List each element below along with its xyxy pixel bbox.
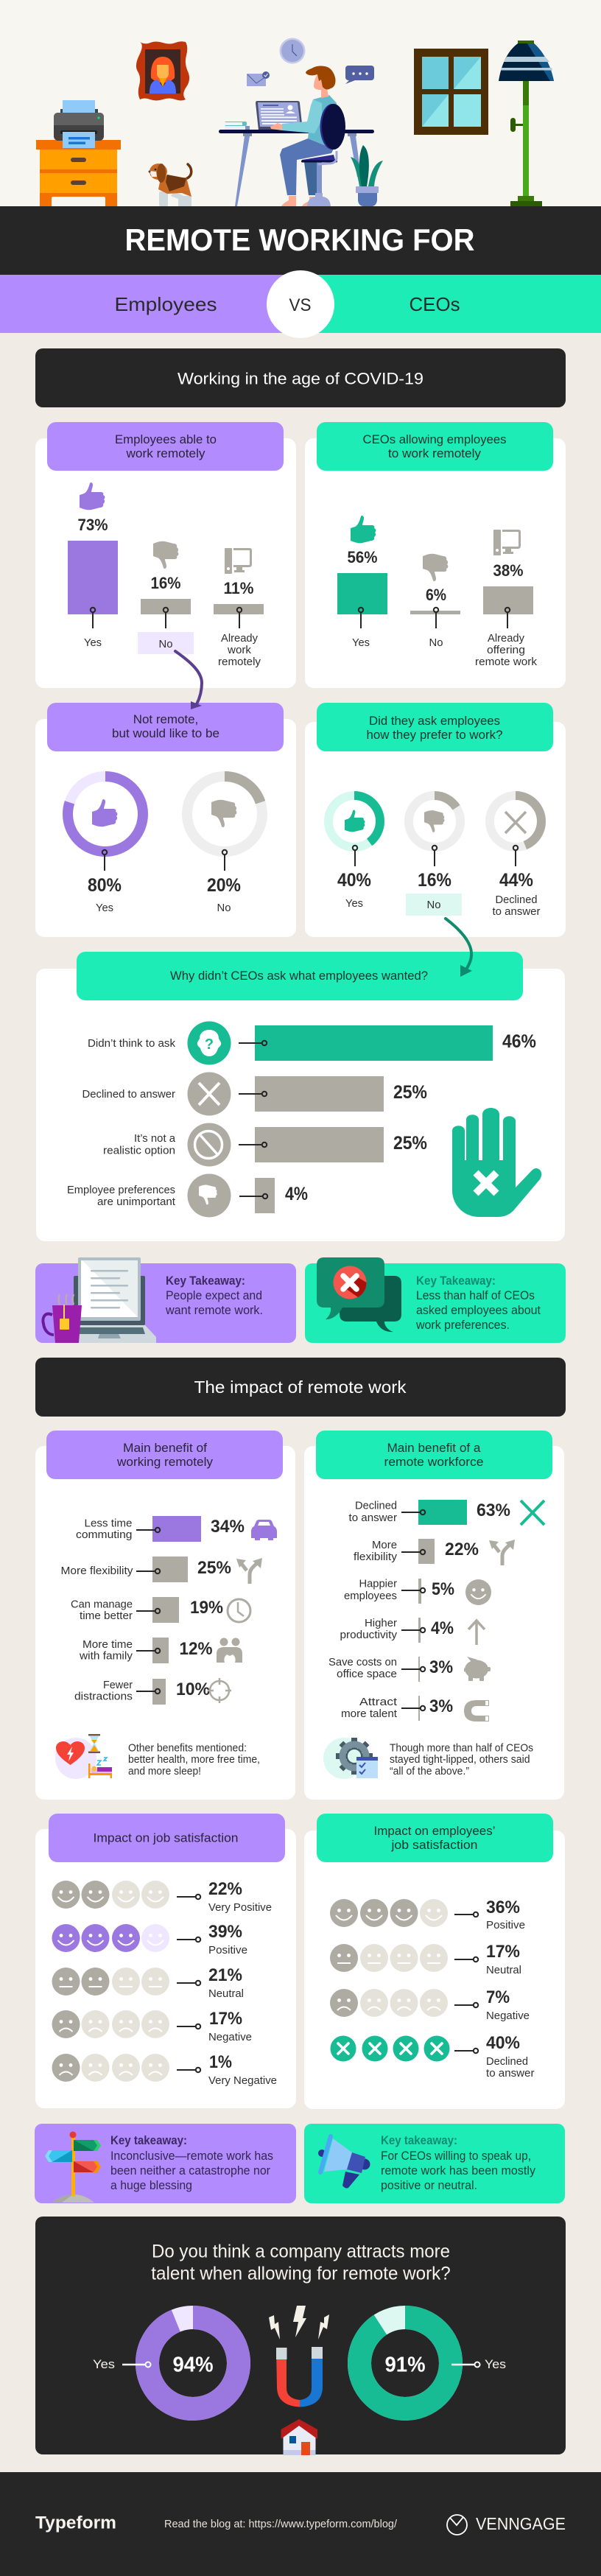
heading bbox=[317, 422, 553, 471]
heading bbox=[47, 422, 284, 471]
note text: Other benefits mentioned: bbox=[128, 1741, 247, 1755]
venngage logo: VENNGAGE bbox=[476, 2514, 566, 2533]
bar chart: 56% bbox=[348, 548, 377, 566]
heading bbox=[151, 2241, 451, 2284]
row: not a realistic option: realistic option bbox=[103, 1145, 175, 1157]
takeaway text: Key Takeaway: bbox=[416, 1274, 496, 1288]
panel: attract talent bbox=[35, 2217, 566, 2455]
row: attract talent bbox=[341, 1696, 489, 1722]
typeform logo: Typeform bbox=[35, 2513, 116, 2533]
row: fewer distractions: distractions bbox=[74, 1690, 133, 1703]
takeaway text: For CEOs willing to speak up, bbox=[381, 2149, 531, 2163]
row: happier employees bbox=[344, 1578, 491, 1605]
panel: not remote but would like to be bbox=[35, 703, 296, 937]
donut: 44 declined: Declined bbox=[495, 894, 538, 906]
heading: Main benefit of bbox=[123, 1441, 207, 1455]
row: neutral: 21% bbox=[208, 1965, 242, 1985]
donut: 16 no bbox=[406, 796, 462, 916]
donut: 80 yes bbox=[68, 776, 143, 914]
donut: 40 yes bbox=[328, 796, 380, 910]
vs badge bbox=[267, 270, 334, 338]
icon: desk top bbox=[219, 130, 374, 133]
takeaway text: asked employees about bbox=[416, 1304, 541, 1317]
icon: computer bbox=[225, 548, 252, 574]
label: yes: Yes bbox=[84, 636, 102, 649]
row: very positive: Very Positive bbox=[208, 1901, 272, 1914]
icon: megaphone bbox=[318, 2136, 370, 2189]
heading bbox=[317, 703, 553, 751]
takeaway text: positive or neutral. bbox=[381, 2178, 477, 2192]
icon: lightning bolts bbox=[269, 2306, 329, 2340]
icon: office chair bbox=[301, 104, 345, 206]
label: no highlighted bbox=[138, 632, 194, 654]
icon: thumbs up bbox=[80, 482, 105, 510]
row: positive: Positive bbox=[208, 1944, 247, 1956]
arrow: no to why bbox=[446, 919, 472, 977]
icon: gear and checklist bbox=[323, 1738, 378, 1779]
icon: chat bubbles with x bbox=[317, 1257, 401, 1332]
heading: Impact on job satisfaction bbox=[93, 1831, 239, 1845]
row: not a realistic option: It’s not a bbox=[134, 1132, 176, 1145]
donut: 40 yes: 40% bbox=[337, 870, 371, 891]
ceos label: CEOs bbox=[410, 293, 460, 315]
row: declined to answer: to answer bbox=[349, 1512, 397, 1524]
donut: 80 yes: Yes bbox=[96, 902, 113, 914]
takeaway text: Inconclusive—remote work has bbox=[110, 2149, 273, 2163]
row: save costs: 3% bbox=[429, 1657, 453, 1677]
row: higher productivity: 4% bbox=[431, 1618, 454, 1638]
heading: Not remote, bbox=[133, 712, 198, 726]
icon: floor lamp bbox=[499, 41, 554, 207]
heading: CEOs allowing employees bbox=[362, 432, 507, 446]
row: didn't think to ask: Didn’t think to ask bbox=[88, 1037, 176, 1050]
heading: Impact on employees’ bbox=[374, 1824, 495, 1838]
icon: dog bbox=[149, 164, 191, 206]
label: already offering: offering bbox=[487, 644, 525, 656]
section heading: covid bbox=[35, 348, 566, 407]
takeaway text: been neither a catastrophe nor bbox=[110, 2163, 270, 2177]
donut: 91 yes bbox=[359, 2317, 506, 2409]
row: employee preferences unimportant bbox=[67, 1174, 308, 1217]
takeaway text: Key takeaway: bbox=[110, 2133, 187, 2147]
hero illustration bbox=[0, 0, 601, 207]
icon: house bbox=[281, 2419, 317, 2455]
row: declined: to answer bbox=[486, 2067, 535, 2080]
icon: thumbs down bbox=[423, 554, 448, 581]
takeaway text: Key Takeaway: bbox=[166, 1274, 245, 1288]
callout: key takeaway ceos bbox=[305, 1257, 566, 1343]
row: employee preferences unimportant: 4% bbox=[285, 1184, 308, 1204]
callout: key takeaway willing to speak up bbox=[304, 2124, 565, 2203]
heading: how they prefer to work? bbox=[367, 728, 502, 742]
row: more flexibility bbox=[354, 1539, 515, 1565]
row: more time with family: More time bbox=[82, 1638, 133, 1651]
callout: key takeaway inconclusive bbox=[35, 2124, 296, 2203]
donut: 91 yes: Yes bbox=[485, 2357, 506, 2371]
note text: “all of the above.” bbox=[390, 1765, 469, 1777]
row: neutral bbox=[330, 1942, 521, 1976]
icon: stop hand bbox=[452, 1108, 541, 1217]
row: happier employees: 5% bbox=[432, 1579, 454, 1599]
takeaway text: Key takeaway: bbox=[381, 2133, 457, 2147]
panel: did they ask employees bbox=[305, 703, 566, 937]
label: already work remotely: Already bbox=[221, 632, 258, 645]
label: already work remotely bbox=[218, 632, 261, 668]
row: positive: 39% bbox=[208, 1922, 242, 1942]
icon: chat bubble bbox=[345, 66, 374, 84]
row: less time commuting bbox=[76, 1516, 277, 1542]
row: neutral: Neutral bbox=[486, 1964, 521, 1976]
icon: health time sleep bbox=[55, 1734, 112, 1779]
note text: better health, more free time, bbox=[128, 1753, 260, 1766]
row: more time with family bbox=[79, 1638, 242, 1663]
icon: envelope bbox=[247, 71, 270, 86]
row: negative bbox=[52, 2009, 252, 2043]
takeaway text bbox=[381, 2133, 535, 2192]
note text bbox=[390, 1741, 533, 1777]
row: save costs: office space bbox=[337, 1668, 397, 1680]
note text: stayed tight-lipped, others said bbox=[390, 1753, 530, 1766]
row: more time with family: with family bbox=[79, 1650, 133, 1662]
row: didn't think to ask bbox=[88, 1021, 536, 1065]
row: more time with family: 12% bbox=[180, 1639, 212, 1659]
takeaway text: remote work has been mostly bbox=[381, 2163, 535, 2177]
row: declined to answer: 63% bbox=[477, 1501, 510, 1520]
label: yes: Yes bbox=[352, 636, 370, 649]
row: less time commuting: commuting bbox=[76, 1529, 133, 1541]
label: already offering: Already bbox=[488, 632, 524, 645]
row: declined to answer: 25% bbox=[393, 1082, 427, 1103]
panel: main benefit of working remotely bbox=[35, 1431, 295, 1800]
donut: 16 no: No bbox=[427, 899, 440, 911]
heading bbox=[46, 1431, 283, 1479]
heading bbox=[317, 1814, 553, 1862]
row: more flexibility: More bbox=[372, 1539, 397, 1551]
takeaway text bbox=[110, 2133, 273, 2192]
row: attract talent: 3% bbox=[429, 1696, 453, 1716]
row: save costs: Save costs on bbox=[328, 1656, 397, 1668]
section heading: impact: The impact of remote work bbox=[194, 1378, 407, 1397]
row: positive bbox=[330, 1898, 525, 1931]
heading: Did they ask employees bbox=[369, 714, 500, 728]
row: neutral bbox=[52, 1965, 244, 2000]
note text bbox=[128, 1741, 260, 1777]
donut: 44 declined: to answer bbox=[492, 905, 541, 918]
icon: cabinet bbox=[36, 140, 121, 207]
row: attract talent: more talent bbox=[341, 1708, 398, 1720]
icon: window bbox=[414, 49, 488, 135]
bar chart: 11% bbox=[224, 579, 253, 597]
row: neutral: 17% bbox=[486, 1942, 520, 1962]
bar chart: 73% bbox=[78, 516, 108, 534]
icon: thumbs up bbox=[351, 516, 376, 543]
row: manage time better: Can manage bbox=[71, 1598, 133, 1610]
row: manage time better: time better bbox=[80, 1610, 133, 1622]
row: positive: Positive bbox=[486, 1919, 525, 1931]
row: not a realistic option bbox=[103, 1123, 427, 1167]
heading: to work remotely bbox=[388, 446, 482, 460]
row: more flexibility: 22% bbox=[445, 1540, 479, 1559]
heading bbox=[49, 1814, 285, 1862]
row: more flexibility: flexibility bbox=[354, 1551, 398, 1563]
versus banner bbox=[0, 270, 601, 338]
employees label: Employees bbox=[115, 293, 217, 315]
row: manage time better bbox=[71, 1597, 250, 1623]
donut: 44 declined: 44% bbox=[499, 870, 533, 891]
row: declined: 40% bbox=[486, 2033, 520, 2053]
icon: potted plant bbox=[351, 145, 383, 206]
row: attract talent: Attract bbox=[359, 1696, 398, 1708]
footer bbox=[0, 2472, 601, 2576]
panel: impact on job satisfaction bbox=[35, 1814, 296, 2108]
row: neutral: Neutral bbox=[208, 1987, 244, 2000]
heading: Why didn’t CEOs ask what employees wanted? bbox=[170, 969, 428, 983]
row: more flexibility bbox=[60, 1557, 262, 1584]
heading: work remotely bbox=[125, 446, 205, 460]
heading: but would like to be bbox=[112, 726, 219, 740]
row: negative: Negative bbox=[208, 2031, 252, 2043]
row: fewer distractions: 10% bbox=[176, 1680, 210, 1699]
row: declined bbox=[330, 2033, 535, 2080]
takeaway text bbox=[415, 1274, 541, 1332]
icon: thumbs down bbox=[153, 541, 178, 569]
row: not a realistic option: 25% bbox=[393, 1133, 427, 1154]
icon: books bbox=[225, 122, 250, 130]
donut: 94 yes bbox=[93, 2317, 239, 2409]
icon: magnet bbox=[276, 2347, 323, 2407]
row: employee preferences unimportant: Employee preferences bbox=[67, 1184, 175, 1196]
label: no highlighted: No bbox=[159, 638, 172, 650]
bar chart: 16% bbox=[150, 574, 181, 592]
panel: impact on employees job satisfaction bbox=[304, 1814, 565, 2109]
donut: 20 no: 20% bbox=[207, 875, 241, 896]
icon: computer bbox=[493, 530, 521, 555]
heading: job satisfaction bbox=[390, 1838, 477, 1852]
venngage logo bbox=[447, 2514, 566, 2535]
row: declined: Declined bbox=[486, 2055, 528, 2068]
row: negative: 17% bbox=[209, 2009, 242, 2029]
section heading: covid: Working in the age of COVID-19 bbox=[178, 370, 423, 387]
row: very positive bbox=[52, 1879, 272, 1914]
row: manage time better: 19% bbox=[190, 1598, 223, 1618]
row: very negative bbox=[52, 2052, 277, 2087]
row: fewer distractions: Fewer bbox=[103, 1679, 133, 1691]
icon: wall clock bbox=[280, 38, 305, 63]
row: positive bbox=[52, 1922, 247, 1956]
heading: Do you think a company attracts more bbox=[152, 2241, 450, 2261]
heading: remote workforce bbox=[384, 1455, 483, 1469]
donut: 94 yes: 94% bbox=[172, 2353, 214, 2376]
note text: Though more than half of CEOs bbox=[390, 1741, 533, 1755]
heading: working remotely bbox=[116, 1455, 213, 1469]
takeaway text: a huge blessing bbox=[110, 2178, 192, 2192]
note text: and more sleep! bbox=[128, 1765, 201, 1777]
row: fewer distractions bbox=[74, 1678, 231, 1705]
label: already work remotely: remotely bbox=[218, 656, 261, 668]
title band bbox=[0, 206, 601, 275]
panel: main benefit of remote workforce bbox=[304, 1431, 564, 1800]
row: negative: 7% bbox=[486, 1987, 510, 2007]
row: happier employees: Happier bbox=[359, 1578, 397, 1590]
icon: printer bbox=[54, 100, 104, 148]
vs label: VS bbox=[289, 295, 311, 315]
row: very negative: Very Negative bbox=[208, 2074, 277, 2087]
bar chart: 38% bbox=[493, 561, 523, 580]
heading bbox=[47, 703, 284, 751]
row: didn't think to ask: 46% bbox=[502, 1031, 536, 1052]
label: already offering: remote work bbox=[475, 656, 537, 668]
row: negative: Negative bbox=[486, 2010, 530, 2022]
icon: portrait frame bbox=[136, 41, 189, 101]
takeaway text bbox=[165, 1274, 263, 1317]
icon: laptop bbox=[256, 101, 303, 130]
arrow: no to not remote bbox=[175, 651, 202, 709]
callout: key takeaway employees bbox=[35, 1257, 296, 1343]
takeaway text: Less than half of CEOs bbox=[416, 1289, 535, 1302]
row: declined to answer bbox=[82, 1073, 427, 1115]
panel: ceos allowing remote work bbox=[305, 422, 566, 688]
panel: why didn't ceos ask bbox=[36, 952, 565, 1241]
donut: 40 yes: Yes bbox=[345, 897, 363, 910]
label: no: No bbox=[429, 636, 443, 649]
row: less time commuting: Less time bbox=[84, 1517, 133, 1529]
row: higher productivity: productivity bbox=[340, 1629, 397, 1641]
row: higher productivity bbox=[340, 1617, 485, 1645]
icon: person at desk bbox=[270, 66, 337, 206]
row: very positive: 22% bbox=[208, 1879, 242, 1899]
row: declined to answer: Declined to answer bbox=[82, 1088, 175, 1101]
row: more flexibility: More flexibility bbox=[60, 1565, 133, 1577]
icon: desk legs bbox=[235, 133, 361, 206]
blog link: Read the blog at: https://www.typeform.com/blog/ bbox=[164, 2519, 398, 2530]
donut: 16 no: 16% bbox=[418, 870, 451, 891]
label: already offering bbox=[475, 632, 537, 668]
heading bbox=[316, 1431, 552, 1479]
donut: 20 no: No bbox=[217, 902, 231, 914]
donut: 91 yes: 91% bbox=[384, 2353, 426, 2376]
row: more flexibility: 25% bbox=[197, 1558, 231, 1578]
row: very negative: 1% bbox=[209, 2052, 232, 2072]
donut: 44 declined bbox=[490, 796, 541, 918]
row: higher productivity: Higher bbox=[365, 1617, 397, 1629]
row: less time commuting: 34% bbox=[211, 1517, 245, 1537]
takeaway text: want remote work. bbox=[165, 1304, 263, 1317]
row: positive: 36% bbox=[486, 1898, 520, 1917]
donut: 20 no bbox=[187, 776, 262, 914]
heading: Main benefit of a bbox=[387, 1441, 481, 1455]
donut: 94 yes: Yes bbox=[93, 2357, 115, 2371]
bar chart bbox=[337, 548, 533, 628]
heading: talent when allowing for remote work? bbox=[151, 2263, 451, 2284]
row: save costs bbox=[328, 1656, 491, 1682]
panel: employees able to work remotely bbox=[35, 422, 296, 688]
row: happier employees: employees bbox=[344, 1590, 397, 1602]
bar chart bbox=[68, 516, 264, 628]
donut: 80 yes: 80% bbox=[88, 875, 122, 896]
takeaway text: work preferences. bbox=[415, 1319, 510, 1332]
takeaway text: People expect and bbox=[166, 1289, 262, 1302]
row: employee preferences unimportant: are unimportant bbox=[97, 1196, 176, 1208]
row: didn't think to ask: ? bbox=[205, 1036, 214, 1053]
label: already work remotely: work bbox=[227, 644, 252, 656]
bar chart: 6% bbox=[426, 586, 446, 604]
heading: Employees able to bbox=[115, 432, 217, 446]
title: REMOTE WORKING FOR bbox=[125, 222, 474, 257]
row: declined to answer: Declined bbox=[355, 1500, 397, 1512]
icon: signpost bbox=[45, 2132, 101, 2203]
icon: laptop and mug bbox=[43, 1257, 156, 1343]
row: negative bbox=[330, 1987, 530, 2022]
section heading: impact bbox=[35, 1358, 566, 1417]
row: declined to answer bbox=[349, 1500, 544, 1525]
heading bbox=[77, 952, 523, 1000]
